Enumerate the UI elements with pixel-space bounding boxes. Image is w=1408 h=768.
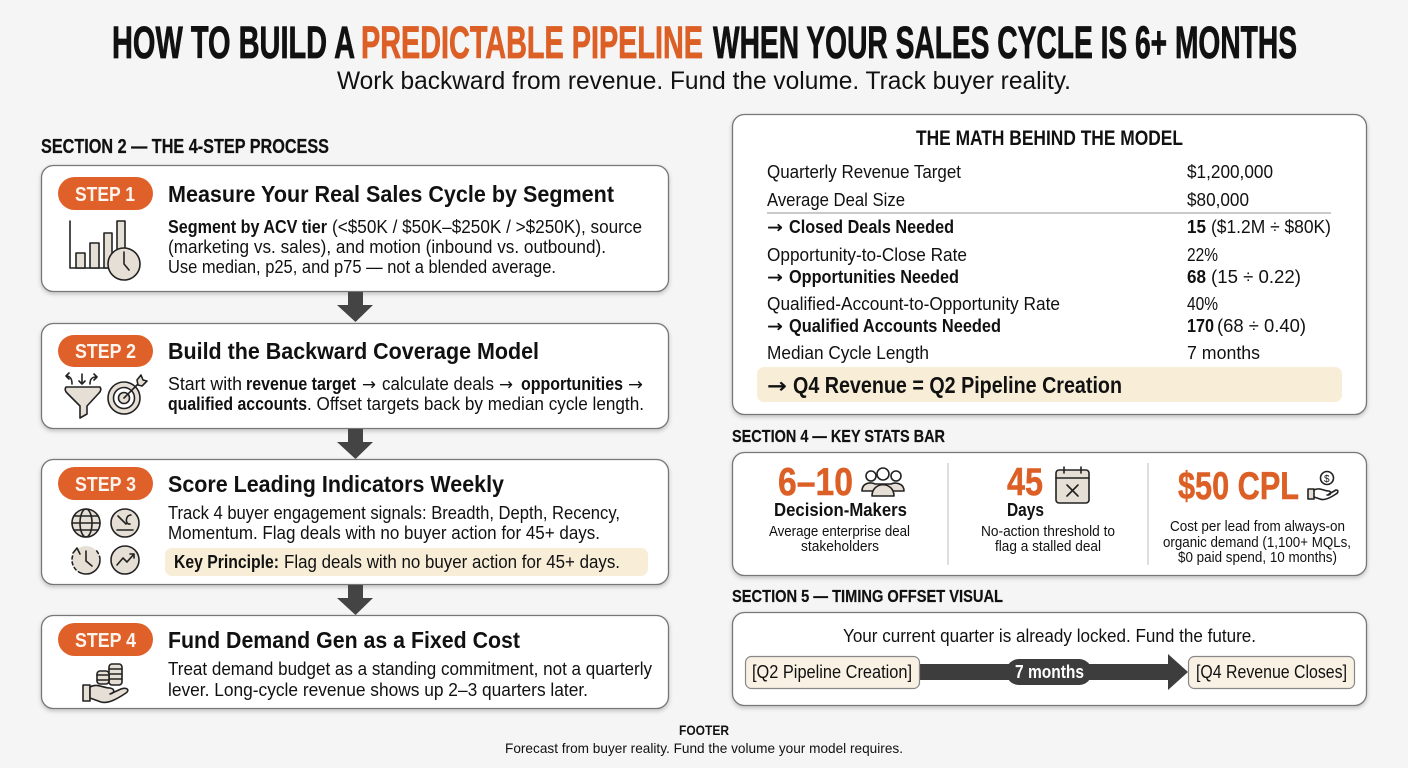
section 4 heading: SECTION 4 — KEY STATS BAR — [732, 426, 945, 446]
pill: 7 months: 7 months — [1015, 662, 1084, 682]
math rows: Average Deal Size — [767, 189, 905, 210]
step 1 heading: Measure Your Real Sales Cycle by Segment — [168, 181, 614, 207]
pill: 7 months — [1006, 659, 1092, 685]
footer — [505, 722, 903, 756]
step 4 body: lever. Long-cycle revenue shows up 2–3 quarters later. — [168, 680, 588, 700]
step 1 badge — [58, 177, 153, 210]
footer: FOOTER — [679, 722, 729, 738]
math rows: (68 ÷ 0.40) — [1217, 315, 1306, 336]
math rows: 170 — [1187, 315, 1214, 336]
step 2 badge: STEP 2 — [75, 341, 136, 363]
stat: days: Days — [1007, 499, 1044, 520]
math rows: 22% — [1187, 244, 1218, 265]
step 2 body: → — [362, 375, 376, 395]
icon: calendar with x — [1056, 467, 1089, 503]
step 2 body: revenue target — [246, 374, 356, 394]
panel: step 2 — [42, 324, 668, 428]
key principle callout — [165, 548, 648, 576]
step 4 body: Treat demand budget as a standing commitment, not a quarterly — [168, 659, 652, 679]
math rows: → — [767, 268, 783, 288]
box: q4 revenue closes: [Q4 Revenue Closes] — [1196, 662, 1347, 682]
math rows: → — [767, 317, 783, 337]
step 2 body: calculate deals — [382, 374, 494, 394]
stat: days: 45 — [1007, 461, 1043, 504]
step 4 badge — [58, 623, 153, 656]
math conclusion callout: → — [767, 374, 787, 398]
math rows: Closed Deals Needed — [789, 216, 954, 237]
key principle callout: Key Principle: — [174, 552, 279, 572]
stat: days: No-action threshold to — [981, 524, 1115, 540]
stat: decision-makers: 6–10 — [778, 461, 853, 504]
math conclusion callout — [757, 367, 1342, 402]
step 3 badge — [58, 467, 153, 500]
stat: decision-makers: stakeholders — [801, 539, 879, 555]
step 2 badge — [58, 335, 153, 367]
math rows: 68 — [1187, 266, 1206, 287]
step 2 heading: Build the Backward Coverage Model — [168, 338, 539, 364]
step 1 body — [168, 217, 642, 277]
step 3 body: Track 4 buyer engagement signals: Breadth, Depth, Recency, — [168, 503, 620, 523]
math rows: 40% — [1187, 293, 1218, 314]
subtitle: Work backward from revenue. Fund the volume. Track buyer reality. — [337, 67, 1071, 95]
step 1 body: (<$50K / $50K–$250K / >$250K), source — [332, 217, 642, 237]
panel: key stats bar — [732, 452, 1366, 576]
step 3 body — [168, 503, 620, 543]
math rows: ($1.2M ÷ $80K) — [1211, 216, 1331, 237]
math rows — [767, 161, 1331, 363]
stat: days — [981, 461, 1115, 555]
math rows: 15 — [1187, 216, 1206, 237]
math rows: Opportunities Needed — [789, 266, 959, 287]
stat: decision-makers: Average enterprise deal — [769, 524, 910, 540]
box: q2 pipeline creation: [Q2 Pipeline Creation] — [752, 662, 912, 682]
section 5 heading: SECTION 5 — TIMING OFFSET VISUAL — [732, 586, 1003, 606]
step 1 body: Segment by ACV tier — [168, 217, 327, 237]
step 4 badge: STEP 4 — [75, 630, 137, 652]
arrow: step 3 to 4 — [337, 585, 373, 615]
section 2 heading: SECTION 2 — THE 4-STEP PROCESS — [41, 136, 329, 158]
stat: cost per lead: Cost per lead from always-on — [1170, 519, 1345, 535]
footer: Forecast from buyer reality. Fund the volume your model requires. — [505, 740, 903, 756]
stat: decision-makers: Decision-Makers — [774, 499, 907, 520]
math rows: Qualified-Account-to-Opportunity Rate — [767, 293, 1060, 314]
step 2 body: Start with — [168, 374, 242, 394]
title — [112, 17, 1297, 68]
title: PREDICTABLE PIPELINE — [361, 17, 703, 68]
math conclusion callout: Q4 Revenue = Q2 Pipeline Creation — [793, 372, 1122, 398]
step 2 body: qualified accounts — [168, 394, 307, 414]
stat: days: flag a stalled deal — [995, 539, 1101, 555]
icon: hand with dollar coin — [1308, 472, 1338, 500]
step 1 body: Use median, p25, and p75 — not a blended average. — [168, 257, 556, 277]
panel: step 1 — [42, 166, 668, 292]
stat: decision-makers — [769, 461, 910, 555]
arrow: step 2 to 3 — [337, 429, 373, 459]
math rows: (15 ÷ 0.22) — [1211, 266, 1301, 287]
math heading: THE MATH BEHIND THE MODEL — [916, 127, 1183, 150]
key principle callout: Flag deals with no buyer action for 45+ days. — [284, 552, 620, 572]
panel: step 3 — [42, 460, 668, 584]
icon: hand with coins — [83, 664, 128, 702]
math rows: Qualified Accounts Needed — [789, 315, 1001, 336]
stat: cost per lead: $50 CPL — [1178, 465, 1299, 508]
icon: bar chart with clock — [70, 221, 140, 280]
step 2 body: opportunities — [521, 374, 623, 394]
math rows: Opportunity-to-Close Rate — [767, 244, 967, 265]
step 3 heading: Score Leading Indicators Weekly — [168, 471, 504, 497]
stat: cost per lead: organic demand (1,100+ MQLs, — [1163, 535, 1351, 551]
step 2 body: . Offset targets back by median cycle length. — [307, 394, 644, 414]
step 4 heading: Fund Demand Gen as a Fixed Cost — [168, 627, 520, 653]
icon: funnel and target — [65, 373, 147, 418]
step 4 body — [168, 659, 652, 700]
arrow: q2 to q4 — [919, 654, 1188, 690]
box: q2 pipeline creation — [746, 656, 920, 688]
step 3 body: Momentum. Flag deals with no buyer action for 45+ days. — [168, 523, 600, 543]
stat: cost per lead — [1163, 465, 1351, 566]
step 1 badge: STEP 1 — [75, 184, 135, 206]
step 3 badge: STEP 3 — [75, 474, 136, 496]
step 2 body: → — [499, 375, 513, 395]
icon: people — [862, 468, 904, 496]
title: HOW TO BUILD A — [112, 17, 355, 68]
panel: the math behind the model — [732, 114, 1366, 414]
arrow: step 1 to 2 — [337, 292, 373, 322]
panel: timing offset visual — [732, 612, 1366, 706]
box: q4 revenue closes — [1188, 656, 1354, 688]
panel: step 4 — [42, 616, 668, 708]
stat: cost per lead: $0 paid spend, 10 months) — [1178, 550, 1337, 566]
icon: four engagement signals — [72, 509, 139, 574]
timing statement: Your current quarter is already locked. Fund the future. — [843, 626, 1256, 646]
math rows: Quarterly Revenue Target — [767, 161, 961, 182]
step 2 body: → — [628, 375, 643, 395]
math rows: → — [767, 218, 783, 238]
math rows: $80,000 — [1187, 189, 1249, 210]
math rows: 7 months — [1187, 342, 1260, 363]
step 1 body: (marketing vs. sales), and motion (inbound vs. outbound). — [168, 237, 606, 257]
math rows: $1,200,000 — [1187, 161, 1273, 182]
icon: hand with dollar coin: $ — [1324, 474, 1330, 485]
step 2 body — [168, 374, 644, 414]
math rows: Median Cycle Length — [767, 342, 929, 363]
